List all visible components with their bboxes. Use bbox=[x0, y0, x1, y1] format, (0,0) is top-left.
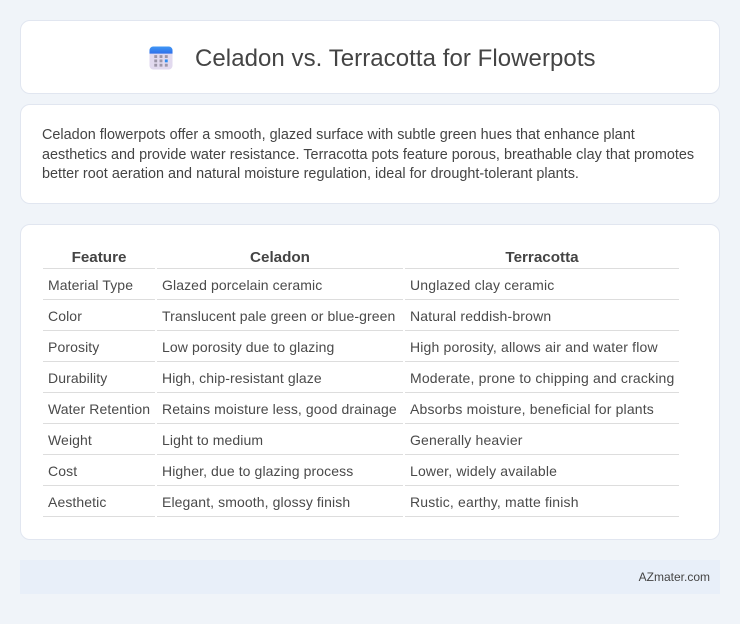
row: porosity: Low porosity due to glazing bbox=[162, 339, 334, 355]
row: porosity: High porosity, allows air and water flow bbox=[410, 339, 658, 355]
row: aesthetic: Aesthetic bbox=[48, 494, 106, 510]
table header: Feature bbox=[72, 249, 126, 266]
row: material type bbox=[48, 277, 554, 293]
row: color: Natural reddish-brown bbox=[410, 308, 551, 324]
table header: Celadon bbox=[250, 249, 310, 266]
row: water retention: Absorbs moisture, beneficial for plants bbox=[410, 401, 654, 417]
row: cost: Higher, due to glazing process bbox=[162, 463, 353, 479]
row: color bbox=[48, 308, 551, 324]
row: aesthetic: Rustic, earthy, matte finish bbox=[410, 494, 579, 510]
row: water retention: Water Retention bbox=[48, 401, 150, 417]
row: durability: Moderate, prone to chipping and cracking bbox=[410, 370, 674, 386]
row: cost: Lower, widely available bbox=[410, 463, 557, 479]
footer bar bbox=[20, 560, 720, 594]
summary text: better root aeration and natural moisture regulation, ideal for drought-tolerant plants. bbox=[42, 166, 579, 182]
row: water retention: Retains moisture less, good drainage bbox=[162, 401, 397, 417]
table header bbox=[72, 249, 579, 266]
row: porosity bbox=[48, 339, 658, 355]
row: material type: Unglazed clay ceramic bbox=[410, 277, 554, 293]
summary text: aesthetics and provide water resistance. Terracotta pots feature porous, breathable clay that promotes bbox=[42, 147, 694, 163]
row: durability bbox=[48, 370, 674, 386]
footer credit: AZmater.com bbox=[639, 570, 710, 584]
row: material type: Glazed porcelain ceramic bbox=[162, 277, 322, 293]
row: durability: High, chip-resistant glaze bbox=[162, 370, 322, 386]
row: weight: Light to medium bbox=[162, 432, 263, 448]
summary text: Celadon flowerpots offer a smooth, glazed surface with subtle green hues that enhance plant bbox=[42, 127, 635, 143]
row: color: Color bbox=[48, 308, 82, 324]
panel: summary bbox=[20, 104, 720, 204]
row: cost: Cost bbox=[48, 463, 77, 479]
title: Celadon vs. Terracotta for Flowerpots bbox=[195, 45, 596, 72]
panel: title card bbox=[20, 20, 720, 94]
summary text bbox=[42, 127, 694, 182]
table header: Terracotta bbox=[505, 249, 579, 266]
row: aesthetic: Elegant, smooth, glossy finish bbox=[162, 494, 350, 510]
row: weight: Weight bbox=[48, 432, 92, 448]
row: aesthetic bbox=[48, 494, 579, 510]
row: weight bbox=[48, 432, 523, 448]
row: water retention bbox=[48, 401, 654, 417]
row: material type: Material Type bbox=[48, 277, 133, 293]
row: color: Translucent pale green or blue-green bbox=[162, 308, 395, 324]
row: porosity: Porosity bbox=[48, 339, 99, 355]
icon: calendar bbox=[149, 46, 173, 70]
row: durability: Durability bbox=[48, 370, 107, 386]
row: weight: Generally heavier bbox=[410, 432, 523, 448]
row: cost bbox=[48, 463, 557, 479]
panel: comparison table bbox=[20, 224, 720, 540]
